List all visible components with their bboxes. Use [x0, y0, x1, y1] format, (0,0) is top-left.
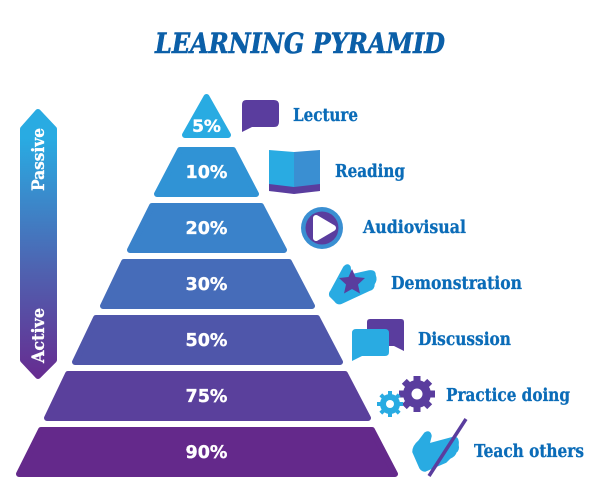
label: discussion: Discussion	[418, 330, 511, 350]
label: audiovisual: Audiovisual	[362, 218, 466, 238]
small gear	[377, 391, 403, 417]
tier 75%	[47, 374, 368, 418]
tier 20%	[130, 206, 284, 250]
icon: gears	[377, 376, 435, 417]
icon: book	[269, 150, 320, 194]
label: teach others: Teach others	[474, 442, 584, 462]
tier 50%	[75, 318, 340, 362]
icon: hand with pointer	[413, 419, 466, 476]
icon: discussion bubbles	[352, 319, 404, 361]
icon: play button	[301, 207, 343, 249]
tier 90%: 90%	[186, 443, 227, 463]
tier 30%	[103, 262, 312, 306]
tier 30%: 30%	[186, 275, 227, 295]
label: active: Active	[29, 308, 49, 364]
tier 10%: 10%	[186, 163, 227, 183]
tier 5%: 5%	[192, 117, 221, 137]
icon: hand with star	[330, 265, 376, 304]
tier 90%	[19, 430, 395, 474]
tier 20%: 20%	[186, 219, 227, 239]
label: demonstration: Demonstration	[391, 274, 522, 294]
title: LEARNING PYRAMID	[154, 27, 446, 60]
label: practice doing: Practice doing	[446, 386, 570, 406]
label: lecture: Lecture	[293, 106, 358, 126]
tier 50%: 50%	[186, 331, 227, 351]
pyramid	[19, 97, 395, 474]
tier 5%	[185, 97, 228, 137]
tier 75%: 75%	[186, 387, 227, 407]
arrow: passive to active scale	[23, 112, 54, 376]
label: reading: Reading	[335, 162, 405, 182]
icon: lecture speech bubble	[242, 100, 279, 132]
label: passive: Passive	[29, 128, 49, 191]
tier 10%	[157, 150, 256, 194]
big gear	[399, 376, 435, 412]
